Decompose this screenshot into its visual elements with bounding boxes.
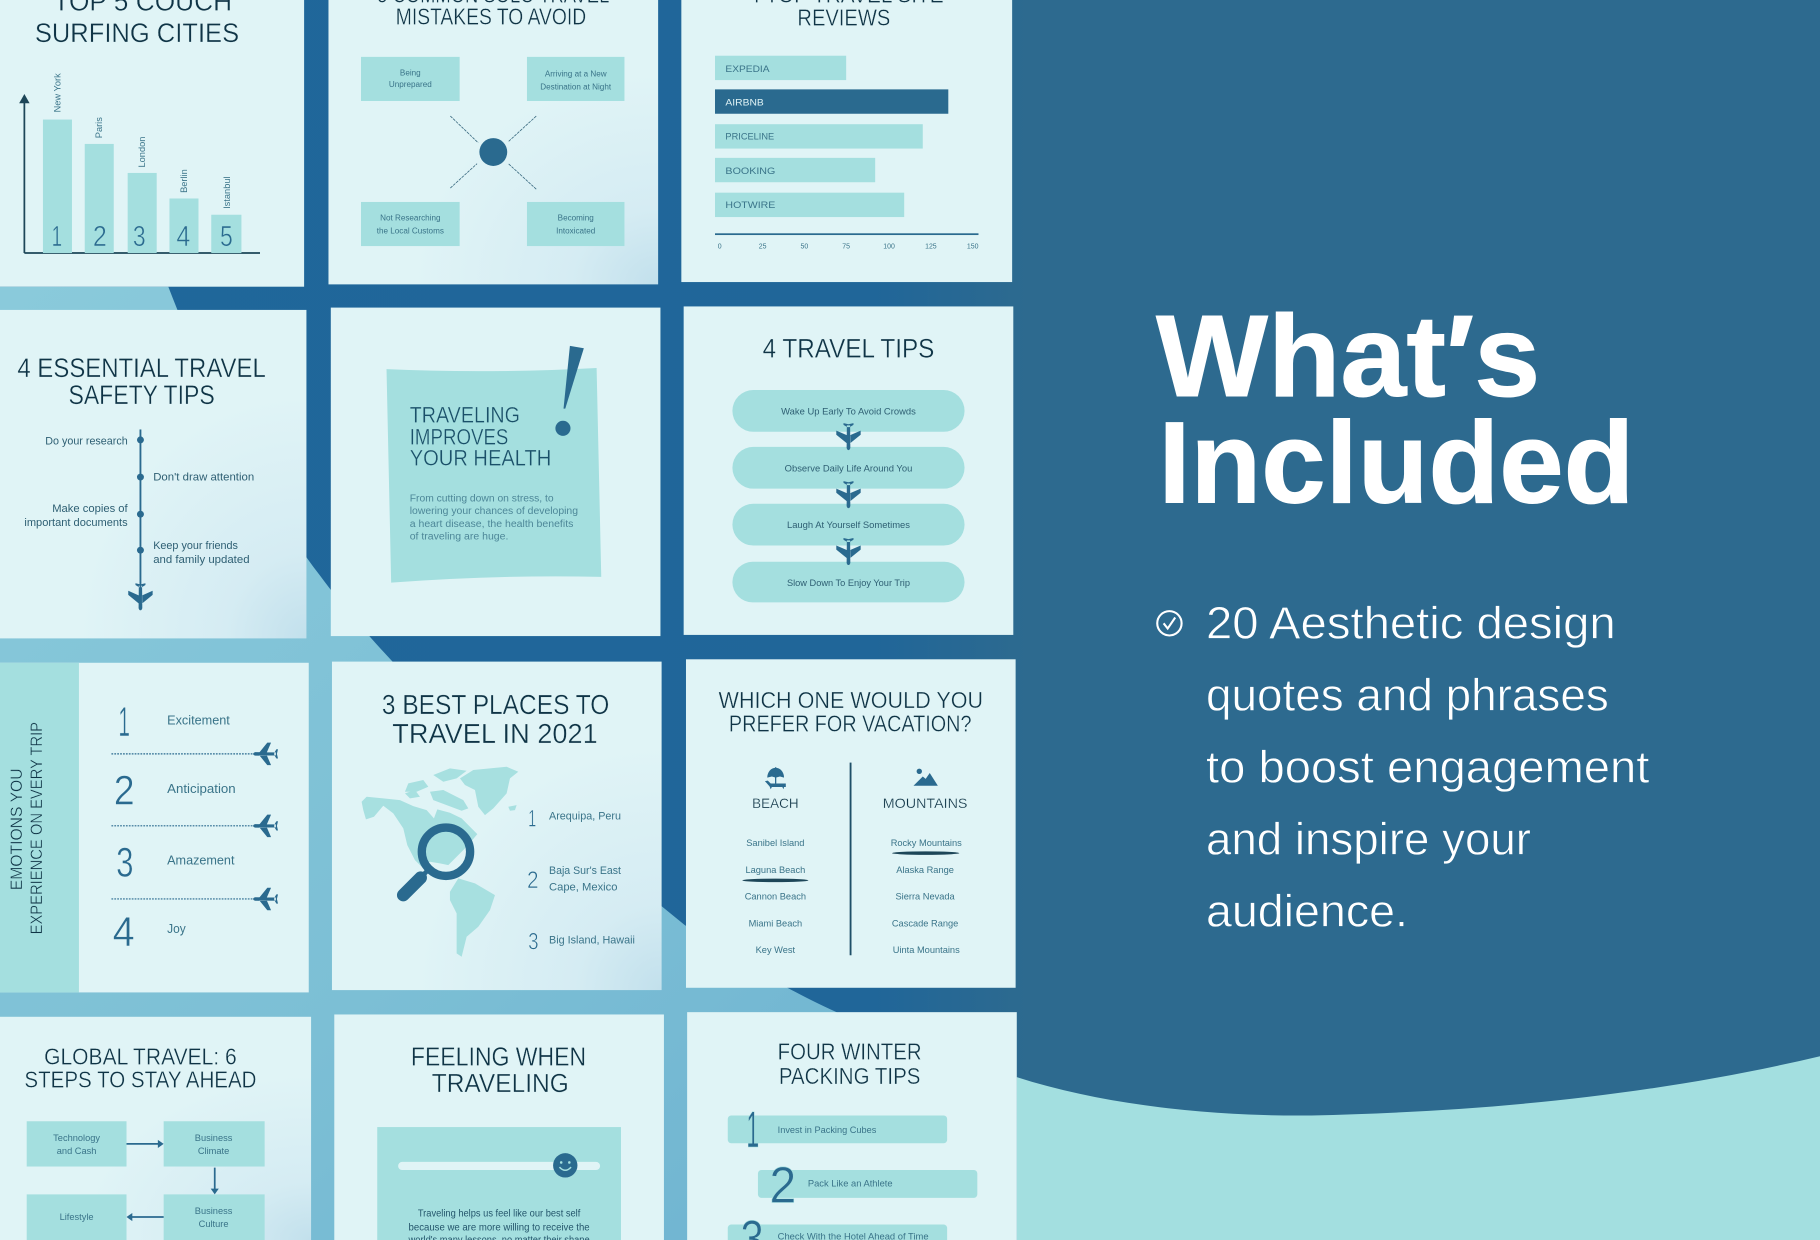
heading: MISTAKES TO AVOID (396, 3, 586, 29)
mistake boxes: Intoxicated (556, 226, 595, 235)
column: beach: Sanibel Island (746, 838, 804, 848)
icon: mountain (913, 769, 938, 786)
heading: TRAVEL IN 2021 (392, 718, 598, 749)
feature text: and inspire your (1206, 813, 1531, 864)
body text: lowering your chances of developing (410, 506, 578, 517)
panel: beach or mountains poll (686, 659, 1016, 988)
horizontal bar chart: PRICELINE (725, 131, 774, 141)
divider line (850, 763, 852, 955)
heading (410, 403, 551, 470)
bar chart (19, 73, 260, 253)
dotted flight paths with planes (111, 743, 278, 910)
panel: 3 best places to travel (332, 662, 662, 990)
column: beach: Laguna Beach (745, 865, 805, 875)
numbered list (113, 698, 236, 955)
heading: STEPS TO STAY AHEAD (24, 1067, 257, 1093)
places list: 2 (527, 867, 539, 894)
heading: TRAVELING (432, 1070, 569, 1098)
bar chart: 5 (220, 221, 233, 253)
mistake boxes: Unprepared (389, 80, 432, 89)
horizontal bar chart: 25 (759, 243, 767, 250)
heading (718, 687, 983, 736)
column: beach: Key West (756, 945, 796, 955)
heading: PACKING TIPS (779, 1063, 920, 1089)
bar chart: 3 (133, 221, 146, 253)
heading (17, 353, 266, 410)
numbered list: 2 (114, 766, 135, 813)
feature text: 20 Aesthetic design (1206, 597, 1616, 648)
panel: common solo travel mistakes (328, 0, 658, 284)
tip pills: Wake Up Early To Avoid Crowds (781, 406, 916, 416)
heading (749, 0, 944, 31)
bar chart: 2 (93, 221, 107, 253)
flow chart: Climate (198, 1146, 229, 1156)
heading: rotated (8, 722, 46, 934)
heading (778, 1039, 922, 1089)
title: What's Included (1156, 291, 1634, 528)
bar chart: New York (52, 73, 62, 112)
packing tips bars: Pack Like an Athlete (808, 1178, 893, 1188)
feature text: quotes and phrases (1206, 669, 1609, 720)
horizontal bar chart (715, 56, 979, 250)
horizontal bar chart: 75 (842, 243, 850, 250)
flow chart: and Cash (57, 1146, 96, 1156)
mistake boxes (361, 57, 624, 246)
heading: YOUR HEALTH (410, 445, 551, 470)
numbered list: Joy (167, 921, 186, 936)
title: What's Included: Included (1158, 398, 1634, 528)
panel: global travel steps (0, 1017, 311, 1240)
heading: 4 ESSENTIAL TRAVEL (17, 353, 266, 383)
icon: planes (836, 423, 861, 565)
bar chart: Istanbul (222, 176, 232, 209)
card with mood slider: Traveling helps us feel like our best self (418, 1208, 580, 1219)
panel: top travel site reviews (681, 0, 1012, 282)
numbered list: Anticipation (167, 781, 236, 796)
panel: top 5 couch surfing cities (0, 0, 304, 287)
places list: Cape, Mexico (549, 881, 617, 893)
places list (527, 805, 635, 955)
heading: SURFING CITIES (35, 18, 239, 48)
heading: rotated: EMOTIONS YOU (8, 768, 26, 890)
feature text: to boost engagement (1206, 741, 1650, 792)
timeline: Keep your friends (153, 540, 238, 552)
mistake boxes: the Local Customs (377, 226, 444, 235)
column: mountains: Alaska Range (896, 865, 954, 875)
timeline: important documents (24, 517, 128, 529)
heading: PREFER FOR VACATION? (729, 710, 972, 736)
feature text: audience. (1206, 885, 1408, 936)
bar chart: Paris (94, 117, 104, 138)
numbered list: Excitement (167, 712, 230, 727)
horizontal bar chart: 50 (801, 243, 808, 250)
packing tips bars: 1 (746, 1101, 759, 1158)
heading (382, 689, 609, 749)
background: darker blue gutter band behind the template grid (0, 0, 1027, 1240)
horizontal bar chart: 100 (883, 243, 895, 250)
column: mountains: MOUNTAINS (883, 795, 967, 811)
timeline (24, 429, 254, 610)
bar chart: Berlin (179, 169, 189, 193)
icon: magnifying glass (403, 828, 470, 895)
panel: four winter packing tips (687, 1012, 1017, 1240)
tip pills: Observe Daily Life Around You (785, 463, 912, 473)
heading: FOUR WINTER (778, 1039, 922, 1065)
heading: 4 TRAVEL TIPS (763, 334, 934, 364)
timeline: Do your research (45, 436, 128, 448)
body text: From cutting down on stress, to (410, 493, 554, 504)
body text (410, 493, 578, 543)
panel: traveling improves your health (331, 308, 660, 636)
horizontal bar chart: EXPEDIA (725, 64, 770, 74)
column: beach: BEACH (752, 795, 799, 811)
card with mood slider: because we are more willing to receive the (409, 1222, 590, 1233)
bar chart: London (137, 137, 147, 168)
heading: FEELING WHEN (411, 1044, 586, 1072)
bar chart: 1 (52, 221, 62, 253)
body text: of traveling are huge. (410, 532, 508, 543)
heading: 3 BEST PLACES TO (382, 689, 609, 720)
panel: emotions you experience (0, 663, 309, 992)
heading: SAFETY TIPS (68, 380, 215, 410)
column: beach (742, 795, 808, 955)
mistake boxes: Being (400, 68, 421, 77)
mistake boxes: Arriving at a New (545, 70, 607, 79)
horizontal bar chart: HOTWIRE (725, 200, 775, 210)
numbered list: Amazement (167, 853, 235, 868)
heading: REVIEWS (797, 5, 890, 31)
flow chart: Technology (53, 1133, 100, 1143)
heading: rotated: EXPERIENCE ON EVERY TRIP (28, 722, 46, 934)
column: beach: Cannon Beach (745, 892, 806, 902)
horizontal bar chart: AIRBNB (725, 98, 764, 108)
heading: TRAVELING (410, 403, 520, 428)
timeline: Don't draw attention (153, 472, 254, 484)
flow chart: Culture (199, 1219, 229, 1229)
mistake boxes: Becoming (558, 214, 594, 223)
places list: 3 (528, 928, 539, 955)
title: What's Included: What′s (1156, 291, 1540, 421)
timeline: Make copies of (52, 503, 129, 515)
numbered list: 1 (118, 698, 130, 745)
flow chart: Lifestyle (60, 1212, 94, 1222)
column: mountains: Uinta Mountains (893, 945, 960, 955)
column: mountains: Sierra Nevada (895, 892, 956, 902)
map: americas and greenland (362, 767, 518, 957)
tip pills (732, 390, 965, 602)
packing tips bars: Invest in Packing Cubes (778, 1125, 877, 1135)
body text: a heart disease, the health benefits (410, 519, 573, 530)
heading (24, 1043, 257, 1093)
horizontal bar chart: 150 (967, 243, 979, 250)
numbered list: 3 (116, 838, 133, 885)
icon: check circle (1157, 611, 1182, 635)
packing tips bars: 2 (770, 1157, 796, 1214)
bar chart: 4 (176, 221, 190, 253)
column: beach: Miami Beach (749, 918, 802, 928)
heading (411, 1044, 586, 1098)
flow chart (27, 1121, 265, 1240)
places list: 1 (528, 805, 536, 832)
world map with magnifying glass (362, 767, 518, 957)
tip pills: Slow Down To Enjoy Your Trip (787, 578, 910, 588)
column: mountains: Cascade Range (892, 918, 958, 928)
panel: feeling when traveling (334, 1014, 664, 1240)
horizontal bar chart: 0 (718, 243, 722, 250)
icon: beach umbrella (765, 767, 786, 789)
heading: GLOBAL TRAVEL: 6 (44, 1043, 237, 1069)
flow chart: Business (195, 1206, 233, 1216)
column: mountains: Rocky Mountains (891, 838, 962, 848)
timeline: and family updated (153, 554, 250, 566)
heading: WHICH ONE WOULD YOU (718, 687, 983, 713)
panel: 4 travel tips (684, 306, 1013, 635)
mistake boxes: Destination at Night (540, 82, 612, 91)
feature text (1206, 597, 1650, 936)
horizontal bar chart: 125 (925, 243, 937, 250)
packing tips bars (728, 1101, 977, 1240)
flow chart: Business (195, 1133, 233, 1143)
heading: IMPROVES (410, 425, 508, 450)
places list: Baja Sur's East (549, 865, 621, 877)
tip pills: Laugh At Yourself Sometimes (787, 520, 910, 530)
column: mountains (883, 795, 967, 955)
places list: Arequipa, Peru (549, 810, 621, 822)
heading (35, 0, 239, 48)
background: light blue diagonal sweep (0, 287, 1017, 1240)
icon: exclamation mark (555, 346, 584, 436)
panel: essential travel safety tips (0, 310, 306, 638)
paper note (387, 368, 601, 583)
horizontal bar chart: BOOKING (725, 166, 775, 176)
mistake boxes: Not Researching (380, 214, 441, 223)
card with mood slider (377, 1127, 621, 1240)
hub diagram (450, 116, 536, 189)
places list: Big Island, Hawaii (549, 935, 635, 947)
background: teal wave (1017, 1056, 1820, 1240)
numbered list: 4 (113, 908, 135, 955)
